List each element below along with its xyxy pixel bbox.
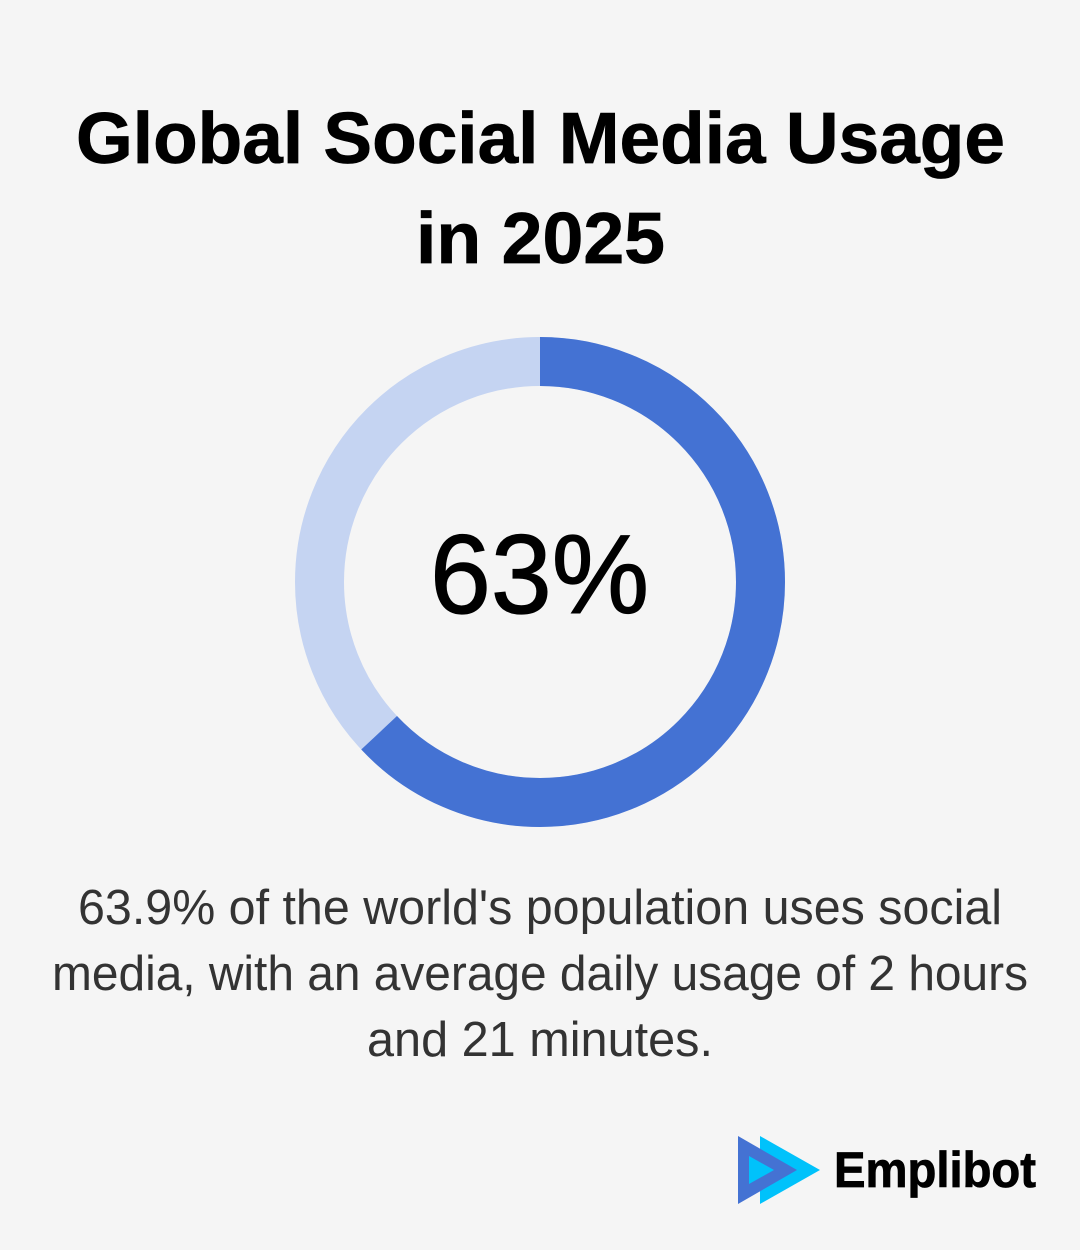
logo: Emplibot <box>738 1136 1036 1204</box>
description text: and 21 minutes. <box>367 1013 713 1067</box>
title: Global Social Media Usage <box>76 99 1005 179</box>
title: in 2025 <box>416 199 665 279</box>
donut chart: 63% <box>320 362 760 802</box>
title <box>76 99 1005 279</box>
description text: media, with an average daily usage of 2 hours <box>52 947 1028 1001</box>
logo: Emplibot: Emplibot <box>834 1142 1036 1198</box>
description text <box>52 881 1028 1067</box>
description text: 63.9% of the world's population uses social <box>78 881 1002 935</box>
donut chart: 63%: 63% <box>430 512 649 637</box>
